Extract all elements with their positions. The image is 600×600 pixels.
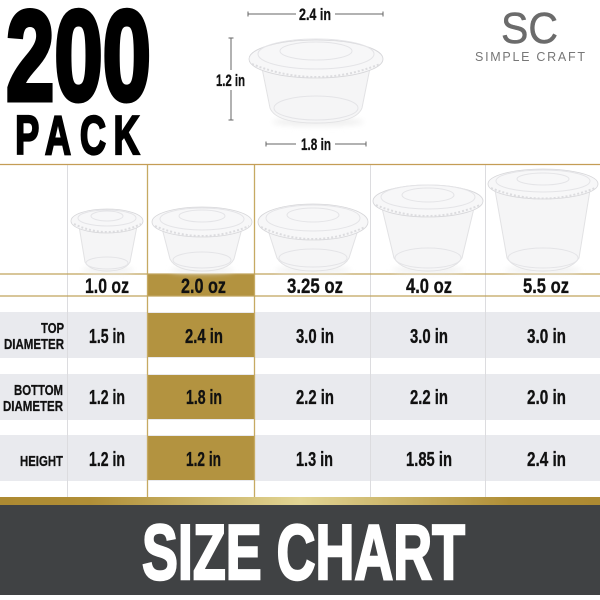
pack count heading: PACK [15, 104, 140, 166]
highlighted column cells [148, 274, 254, 480]
row: bottom diameter: 1.8 in [186, 387, 222, 409]
icon: hero cup with lid [249, 39, 383, 126]
brand logo: SIMPLE CRAFT [475, 50, 585, 64]
row: bottom diameter: DIAMETER [3, 399, 63, 415]
row: bottom diameter: 1.2 in [89, 387, 125, 409]
capacity row: 2.0 oz [181, 274, 226, 298]
brand logo [475, 4, 585, 64]
top diameter dimension [248, 5, 383, 24]
brand logo: SC [501, 4, 558, 53]
top diameter dimension: 2.4 in [299, 5, 331, 24]
row: top diameter: 1.5 in [89, 326, 125, 348]
icon: 3.25 oz cup [258, 204, 368, 273]
row: height: HEIGHT [20, 454, 63, 470]
row: bottom diameter: 2.2 in [296, 387, 334, 409]
product dimension diagram [216, 5, 383, 154]
row bands [0, 312, 600, 481]
row: top diameter: 3.0 in [410, 326, 448, 348]
banner title: SIZE CHART [142, 508, 465, 596]
row: bottom diameter: 2.2 in [410, 387, 448, 409]
row: top diameter: TOP [41, 321, 64, 337]
row: height: 2.4 in [527, 449, 566, 471]
icon: 4.0 oz cup [373, 185, 483, 273]
footer banner [0, 497, 600, 596]
icon: 2.0 oz cup [152, 207, 252, 273]
bottom diameter dimension [266, 135, 366, 154]
row: bottom diameter [3, 383, 566, 415]
row: top diameter: 3.0 in [296, 326, 334, 348]
row: top diameter: DIAMETER [4, 337, 64, 353]
row: height: 1.2 in [89, 449, 125, 471]
capacity row: 1.0 oz [85, 274, 129, 298]
size chart table [0, 164, 600, 497]
icon: 5.5 oz cup [488, 169, 598, 273]
capacity row: 4.0 oz [406, 274, 452, 298]
icon: 1.0 oz cup [71, 209, 143, 273]
bottom diameter dimension: 1.8 in [301, 135, 331, 154]
row: top diameter: 2.4 in [185, 326, 223, 348]
row: top diameter: 3.0 in [527, 326, 566, 348]
row: bottom diameter: 2.0 in [527, 387, 566, 409]
row: height: 1.2 in [186, 449, 221, 471]
row: bottom diameter: BOTTOM [14, 383, 63, 399]
capacity row: 3.25 oz [287, 274, 343, 298]
row: height [20, 449, 566, 471]
capacity row: 5.5 oz [523, 274, 569, 298]
height dimension: 1.2 in [216, 71, 245, 90]
capacity row [85, 274, 569, 298]
row: top diameter [4, 321, 566, 353]
pack count heading [6, 0, 151, 166]
row: height: 1.85 in [406, 449, 452, 471]
row: height: 1.3 in [296, 449, 333, 471]
height dimension [216, 38, 245, 120]
